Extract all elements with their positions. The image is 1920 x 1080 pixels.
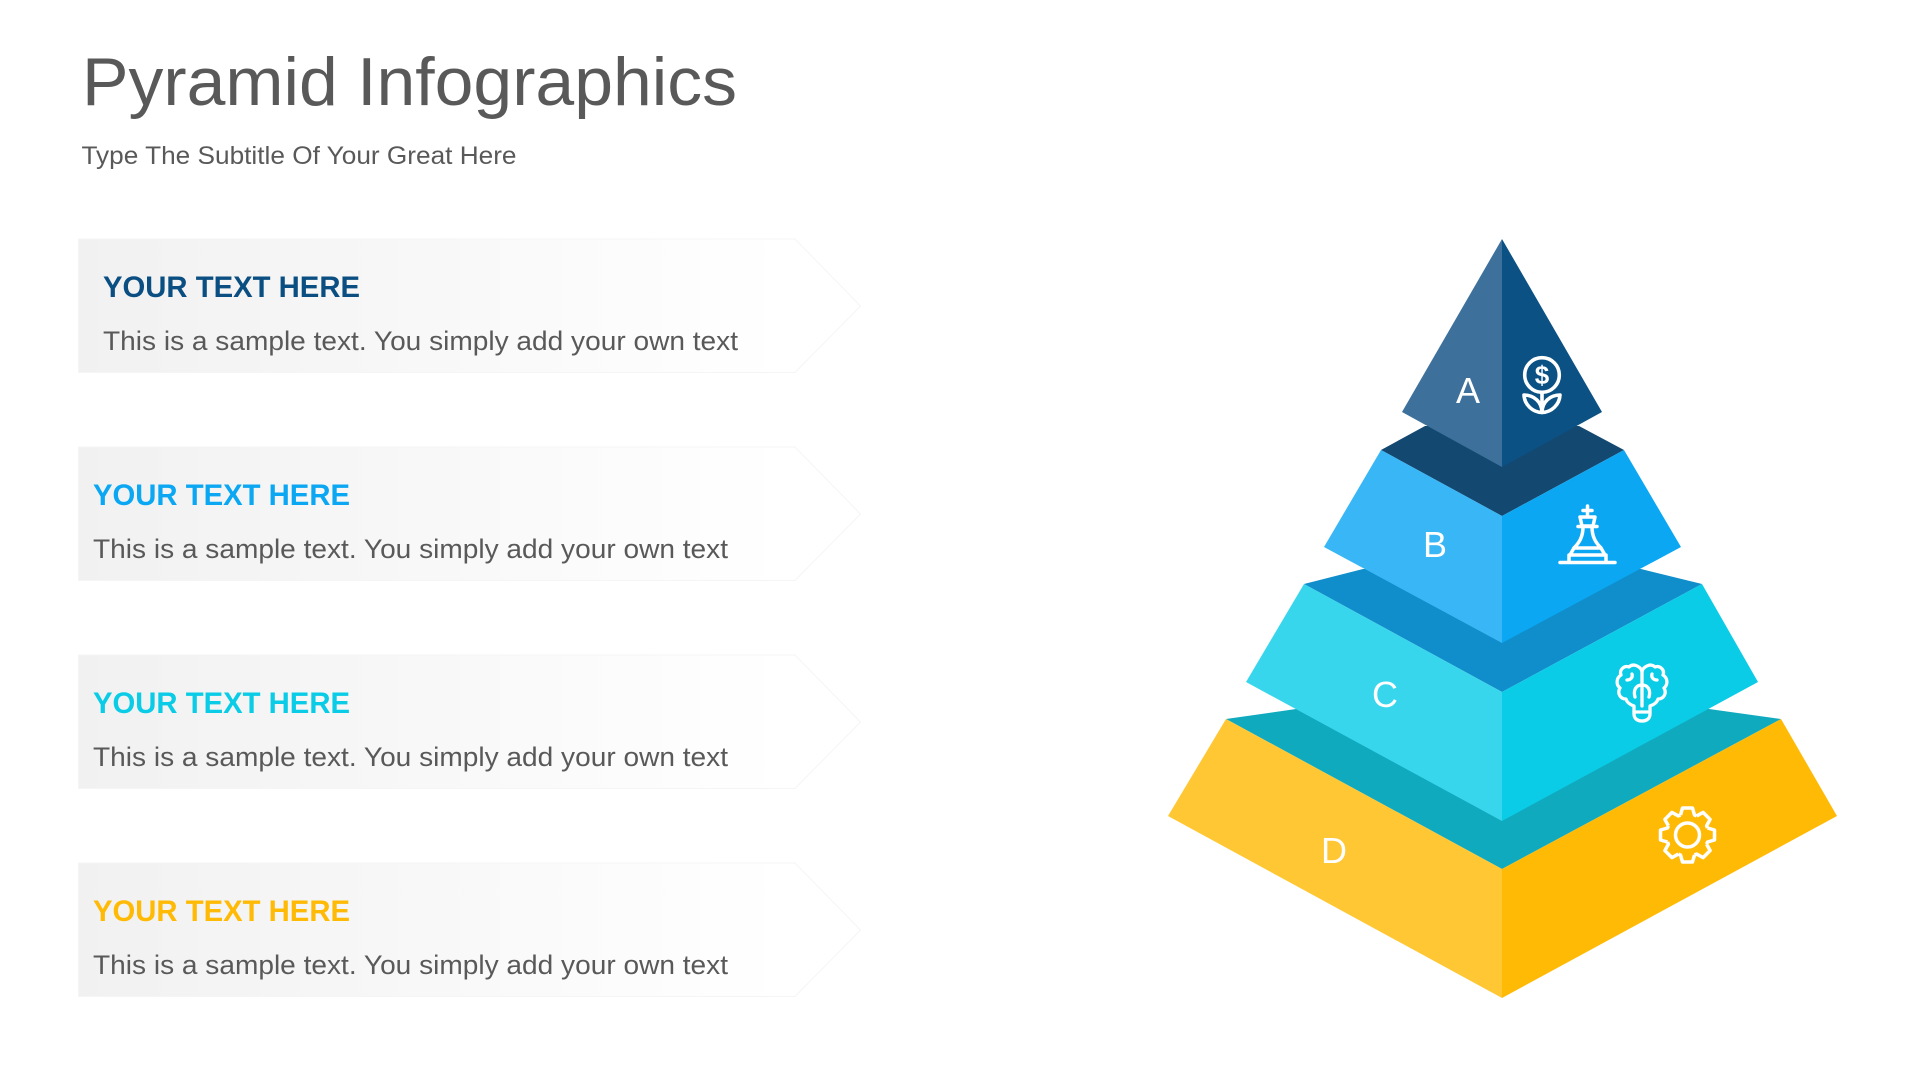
- card 3 body: This is a sample text. You simply add your own text: [93, 742, 729, 772]
- pyramid tier B: [1324, 426, 1681, 643]
- panel: card 4: [78, 863, 860, 996]
- dollar sign: $: [1535, 360, 1550, 390]
- card 1 body: This is a sample text. You simply add your own text: [103, 326, 739, 356]
- icon: money flower: [1524, 358, 1560, 413]
- icon: brain bulb: [1617, 665, 1667, 721]
- card 3 heading: YOUR TEXT HERE: [93, 687, 350, 720]
- card 2 body: This is a sample text. You simply add your own text: [93, 534, 729, 564]
- card 2 heading: YOUR TEXT HERE: [93, 479, 350, 512]
- pyramid tier C: [1246, 569, 1758, 821]
- letter C: C: [1372, 674, 1398, 715]
- card 4 heading: YOUR TEXT HERE: [93, 895, 350, 928]
- pyramid tier D: [1168, 709, 1837, 998]
- card 1 heading: YOUR TEXT HERE: [103, 271, 360, 304]
- letter B: B: [1423, 524, 1447, 565]
- letter A: A: [1456, 370, 1480, 411]
- card 4 body: This is a sample text. You simply add your own text: [93, 950, 729, 980]
- subtitle: Type The Subtitle Of Your Great Here: [82, 142, 516, 170]
- panel: card 3: [78, 655, 860, 788]
- title: Pyramid Infographics: [82, 44, 737, 120]
- icon: chess king: [1560, 506, 1615, 562]
- pyramid tier A: [1402, 239, 1602, 467]
- icon: gear: [1660, 808, 1714, 862]
- letter D: D: [1321, 830, 1347, 871]
- panel: card 2: [78, 447, 860, 580]
- panel: card 1: [78, 239, 860, 372]
